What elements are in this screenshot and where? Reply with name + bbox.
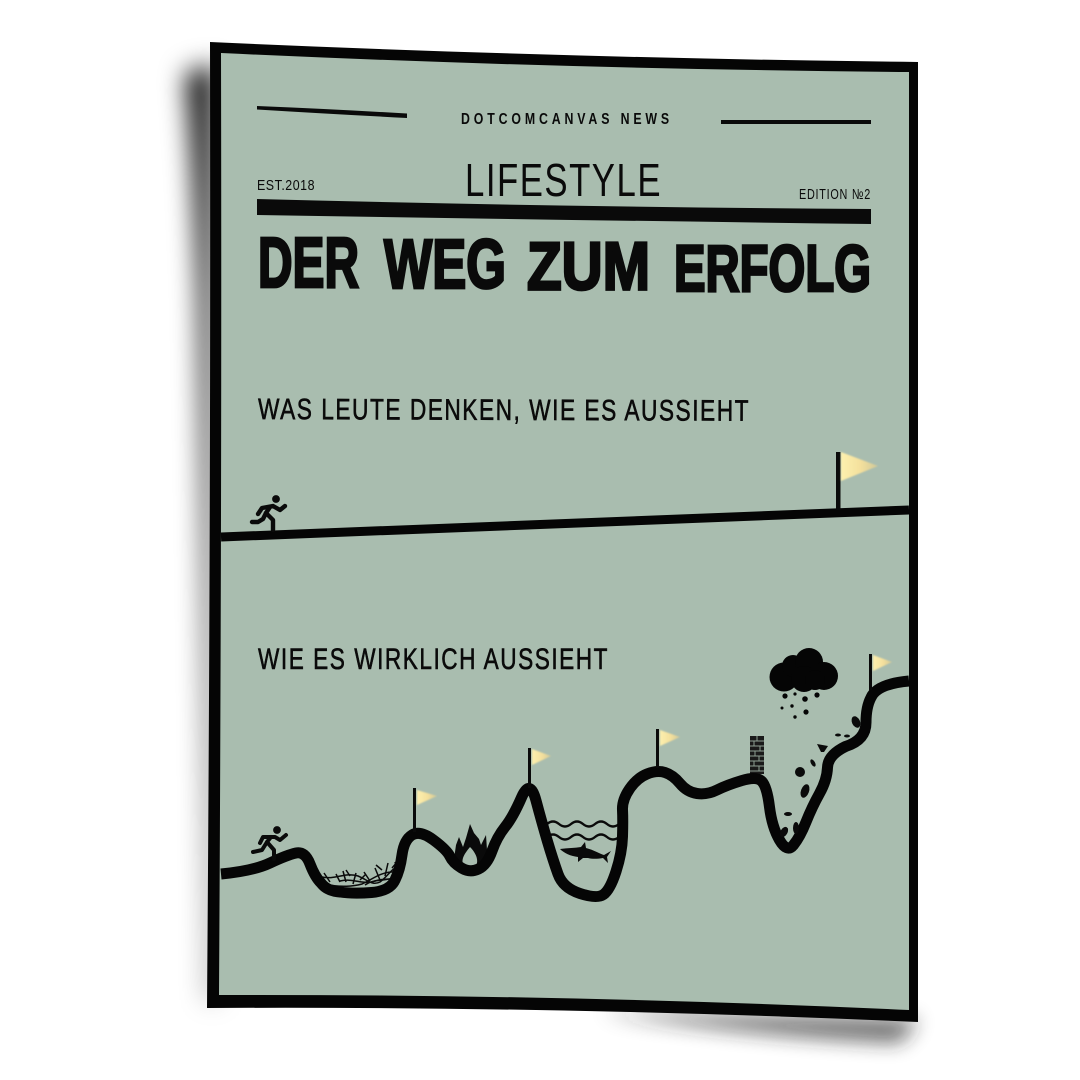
headline: DER (258, 224, 359, 303)
icon: fire (453, 824, 488, 874)
headline: WEG (384, 225, 506, 303)
icon: shark (560, 842, 611, 863)
straight path (221, 510, 909, 537)
rule right (721, 120, 871, 124)
headline: ZUM (527, 228, 650, 304)
established: EST.2018 (257, 178, 315, 194)
poster paper (219, 53, 909, 1010)
icon: runner top (252, 495, 285, 530)
icon: thorns (322, 861, 399, 886)
flag 4 (869, 654, 892, 690)
winding path (221, 681, 909, 897)
poster shadow (186, 64, 918, 1042)
icon: brick wall (750, 736, 764, 774)
masthead (257, 106, 871, 224)
flag 3 (656, 729, 680, 768)
icon: falling rocks (778, 715, 862, 839)
edition: EDITION №2 (799, 187, 871, 203)
publisher: DOTCOMCANVAS NEWS (461, 111, 673, 128)
poster frame (207, 42, 918, 1022)
flag 2 (528, 748, 551, 788)
rule left (257, 106, 407, 118)
icon: runner bottom (253, 826, 286, 859)
headline (258, 224, 871, 305)
icon: water waves (547, 822, 619, 840)
flag top (836, 452, 878, 510)
section title: LIFESTYLE (465, 154, 662, 206)
subheading: expectation: WAS LEUTE DENKEN, WIE ES AUSSIEHT (258, 393, 750, 428)
icon: rain cloud (770, 648, 838, 719)
subheading: reality: WIE ES WIRKLICH AUSSIEHT (258, 643, 609, 676)
headline: ERFOLG (674, 231, 871, 305)
thick rule (257, 199, 871, 224)
flag 1 (413, 788, 437, 832)
